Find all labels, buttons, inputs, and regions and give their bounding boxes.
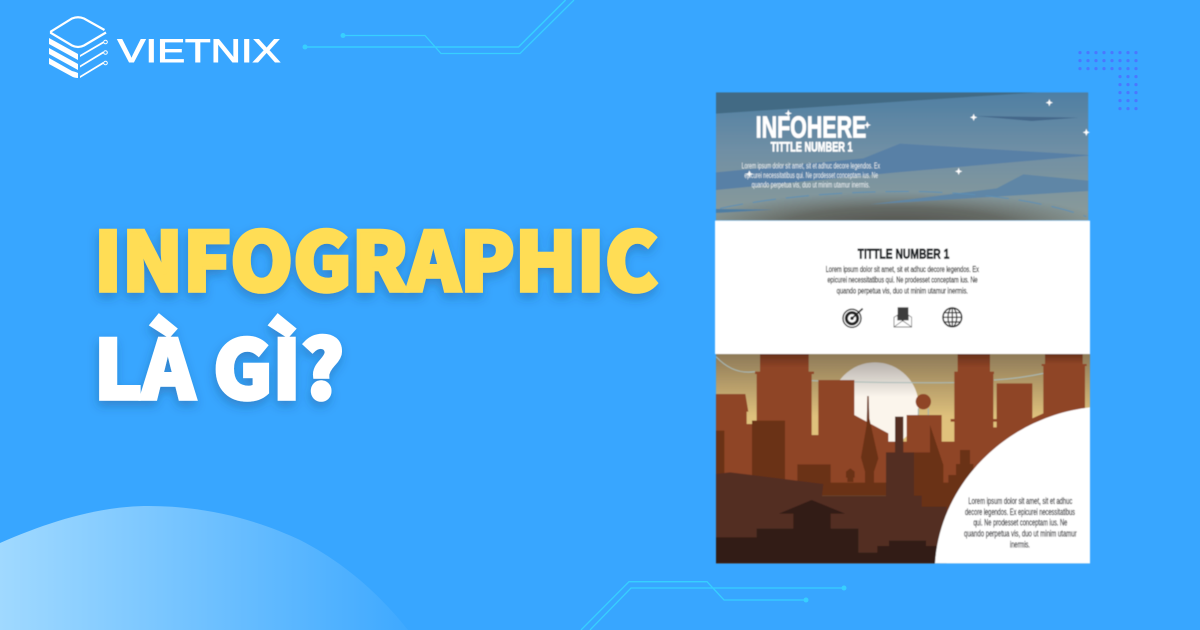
circuit lines top [302,0,574,54]
sky body text: Lorem ipsum dolor sit amet, sit et adhuc decore legendos. Ex [742,161,880,170]
buildings [716,354,1087,483]
panel: city skyline [716,354,1090,563]
dot grid top-right [1078,51,1138,110]
icon: stars [746,99,1090,178]
logo [49,17,280,78]
sky body text [742,161,880,190]
middle body text [826,264,979,295]
darkest foreground [716,500,940,563]
corner body text: quando perpetua vis, duo ut minim utamur [964,528,1077,538]
sun [840,362,920,442]
headline line 2: LÀ GÌ? [94,306,344,423]
middle body text: quando perpetua vis, duo ut minim utamur inermis. [837,285,968,295]
sky subheading: TITTLE NUMBER 1 [771,139,853,154]
panel: sky header [715,92,1090,221]
middle body text: Lorem ipsum dolor sit amet, sit et adhuc decore legendos. Ex [826,264,979,274]
chimney and hill [716,417,947,563]
icon: globe [943,308,962,327]
circuit lines bottom [581,582,846,630]
sky heading: INFOHERE [756,110,866,144]
white corner shape [935,407,1090,563]
icon: envelope [894,307,912,327]
sky body text: epicurei necessitatibus qui. Ne prodesset conceptam ius. Ne [744,171,878,180]
corner body text [964,496,1077,549]
headline line 1: INFOGRAPHIC [94,198,658,315]
darker foreground buildings [716,396,973,517]
corner body text: qui. Ne prodesset conceptam ius. Ne [973,518,1067,528]
panel: white middle band [715,221,1090,354]
icon: server stack [49,17,107,78]
middle heading: TITTLE NUMBER 1 [858,246,949,262]
middle body text: epicurei necessitatibus qui. Ne prodesset conceptam ius. Ne [827,275,978,285]
infographic poster preview [714,92,1091,564]
wordmark: VIETNIX [118,33,280,69]
corner body text: decore legendos. Ex epicurei necessitatibus [965,507,1075,517]
headline [94,198,658,423]
decorative blob bottom-left [0,506,408,630]
corner body text: Lorem ipsum dolor sit amet, sit et adhuc [968,496,1073,506]
icon: target [843,309,863,327]
sky body text: quando perpetua vis, duo ut minim utamur inermis. [752,181,870,190]
corner body text: inermis. [1010,539,1030,549]
